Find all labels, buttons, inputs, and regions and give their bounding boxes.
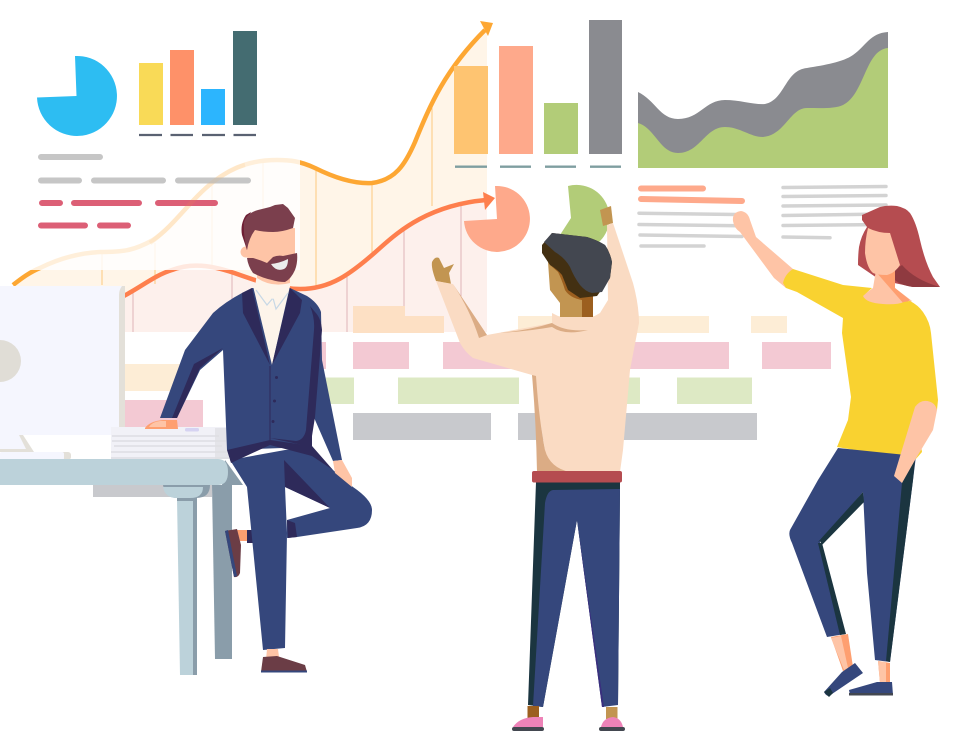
pie chart: salmon [464, 186, 530, 252]
man: neck [255, 272, 290, 299]
woman: trousers [789, 448, 916, 662]
placeholder text lines: far right [783, 186, 886, 238]
man: front shoe [261, 649, 307, 672]
behind man: trousers [528, 482, 620, 707]
behind man: belt [532, 471, 622, 482]
stack of papers [111, 427, 229, 459]
bar chart: right [454, 20, 622, 167]
desk [0, 459, 243, 675]
man: neck shade [257, 272, 290, 285]
bar chart: left [139, 31, 257, 135]
woman: hair [858, 206, 940, 287]
woman: neck and chest [862, 268, 912, 306]
woman: sweater [783, 269, 938, 460]
woman: raised arm [733, 211, 793, 288]
woman: lower arm in pocket [894, 401, 937, 483]
behind man: raised hands [432, 206, 613, 284]
behind man: shirt [436, 223, 639, 472]
man: hand on papers [145, 420, 178, 429]
stacked area chart [638, 32, 888, 168]
man seen from behind [432, 206, 639, 731]
woman: feet [824, 634, 893, 697]
pie chart: blue [37, 56, 117, 136]
man: standing leg [230, 450, 287, 650]
man: bent leg [284, 448, 372, 538]
schedule bars behind figures [93, 306, 831, 497]
woman: face [865, 228, 900, 275]
man: hand on knee [333, 460, 352, 487]
placeholder text lines: centre right [639, 188, 742, 246]
man: shirt and collar [242, 286, 302, 365]
behind man: neck and head [548, 262, 593, 317]
man: back foot and shoe [225, 529, 254, 577]
man: head and beard [240, 204, 297, 282]
man in blue suit [160, 204, 372, 672]
area chart with two rising trend lines [0, 28, 487, 332]
man: jacket [160, 288, 342, 470]
computer monitor [0, 286, 125, 460]
woman in yellow sweater [733, 206, 940, 697]
pale curve crossing the left text lines [150, 165, 245, 243]
behind man: feet [512, 706, 625, 731]
arrowheads on trend lines [480, 21, 495, 210]
placeholder text lines: left [41, 157, 248, 226]
behind man: hair [542, 233, 612, 298]
pie chart: green [558, 185, 610, 248]
